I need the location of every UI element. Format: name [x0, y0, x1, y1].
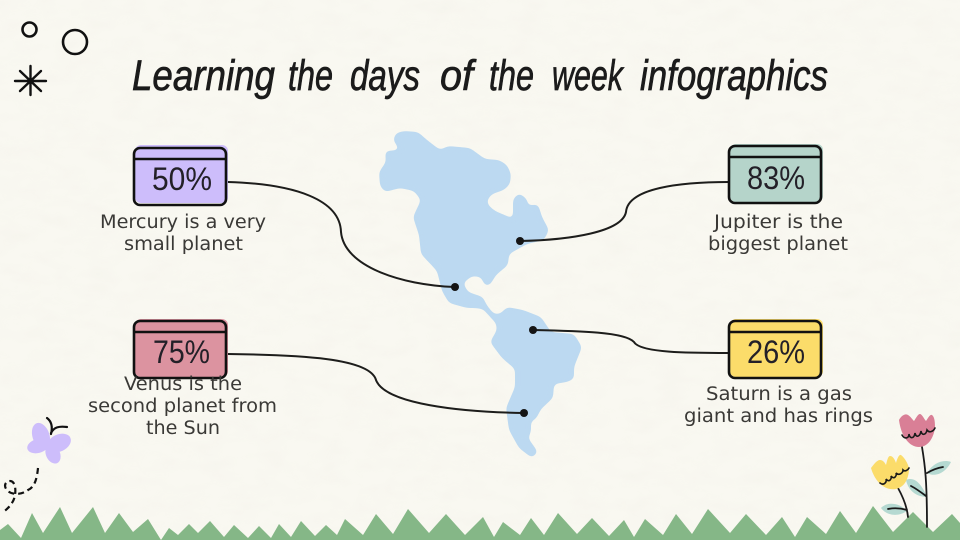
icon: butterfly	[26, 418, 74, 466]
map: the Americas	[379, 131, 582, 458]
connector: Saturn	[533, 330, 729, 353]
connector: Mercury	[228, 182, 455, 287]
text: Saturn description	[684, 384, 873, 427]
text: Jupiter description: Jupiter is the	[713, 212, 843, 233]
panel: Saturn	[684, 319, 873, 427]
grass	[0, 506, 960, 540]
icon: small circle	[22, 22, 36, 36]
stems	[888, 447, 943, 527]
percentage: 26%: 26%	[747, 334, 805, 370]
yellow tulip	[871, 455, 909, 489]
icon: flowers	[871, 414, 951, 527]
text: Jupiter description: biggest planet	[708, 234, 848, 255]
text: Jupiter description	[708, 212, 848, 255]
marker: Jupiter dot	[516, 237, 524, 245]
scribbles	[902, 428, 935, 438]
panel: Jupiter	[708, 144, 848, 255]
percentage: 50%: 50%	[152, 161, 212, 197]
text: Venus description: second planet from	[88, 396, 277, 417]
leaves	[881, 461, 951, 515]
icon: dashed flight path	[2, 468, 38, 513]
icon: large circle	[63, 30, 87, 54]
percentage: 83%: 83%	[747, 160, 805, 196]
title: days	[350, 52, 420, 100]
pink tulip	[899, 414, 935, 447]
percentage: 75%: 75%	[153, 334, 210, 370]
title	[132, 52, 828, 100]
text: Mercury description: Mercury is a very	[100, 212, 266, 233]
connector: Jupiter	[520, 182, 729, 241]
connector: Venus	[228, 354, 524, 413]
title: the	[489, 52, 534, 100]
title: week	[552, 52, 625, 100]
title: Learning	[132, 52, 275, 100]
text: Saturn description: Saturn is a gas	[706, 384, 852, 405]
icon: asterisk	[15, 66, 46, 95]
panel: Mercury	[100, 145, 266, 255]
text: Saturn description: giant and has rings	[684, 406, 873, 427]
marker: Saturn dot	[529, 326, 537, 334]
panel: Venus	[88, 319, 277, 439]
title: of	[440, 52, 477, 100]
marker: Venus dot	[520, 409, 528, 417]
title: infographics	[640, 52, 828, 100]
text: Venus description	[88, 374, 277, 439]
title: the	[288, 52, 333, 100]
text: Mercury description: small planet	[124, 234, 243, 255]
text: Venus description: the Sun	[146, 418, 220, 439]
text: Venus description: Venus is the	[124, 374, 242, 395]
marker: Mercury dot	[451, 283, 459, 291]
text: Mercury description	[100, 212, 266, 255]
